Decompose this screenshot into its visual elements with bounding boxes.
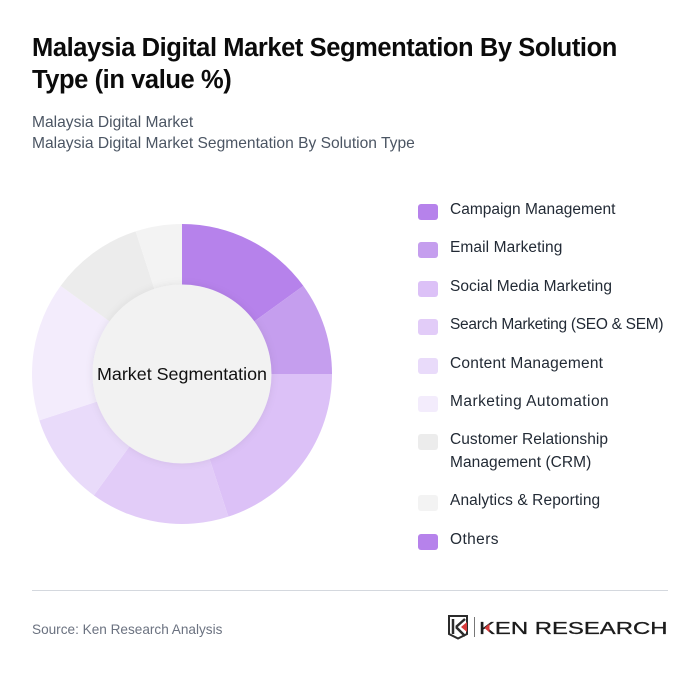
wordmark: KEN RESEARCH	[479, 618, 668, 638]
legend: Email Marketing	[450, 239, 562, 256]
legend item: Campaign Management	[418, 201, 616, 220]
legend: Others	[450, 531, 499, 548]
logo: Ken Research	[448, 615, 668, 640]
title: Malaysia Digital Market Segmentation By Solution	[32, 34, 617, 62]
legend: Social Media Marketing	[450, 278, 612, 295]
icon: shield	[449, 616, 467, 638]
donut chart	[32, 224, 332, 524]
legend item: Others	[418, 531, 499, 550]
legend: Customer Relationship	[450, 431, 608, 448]
legend: Marketing Automation	[450, 393, 609, 410]
source note: Source: Ken Research Analysis	[32, 622, 222, 637]
legend item: Search Marketing	[418, 316, 663, 335]
legend item: Analytics & Reporting	[418, 492, 600, 511]
legend: Campaign Management	[450, 201, 615, 218]
legend: Content Management	[450, 355, 603, 372]
title: Type (in value %)	[32, 66, 231, 94]
legend item: Social Media Marketing	[418, 278, 612, 297]
subtitle text: Malaysia Digital Market Segmentation By Solution Type	[32, 135, 415, 152]
donut centre label	[92, 284, 272, 464]
legend: Search Marketing (SEO & SEM)	[450, 316, 663, 333]
subtitle text	[32, 114, 415, 152]
legend item: Marketing Automation	[418, 393, 609, 412]
legend item: Email Marketing	[418, 239, 562, 258]
legend item: Content Management	[418, 355, 603, 374]
legend	[418, 201, 663, 550]
donut centre label: Market Segmentation	[97, 364, 267, 384]
subtitle text: Malaysia Digital Market	[32, 114, 193, 131]
legend: Management (CRM)	[450, 454, 591, 470]
title	[32, 34, 617, 94]
legend item: Customer Relationship Management	[418, 431, 608, 470]
legend: Analytics & Reporting	[450, 492, 600, 509]
